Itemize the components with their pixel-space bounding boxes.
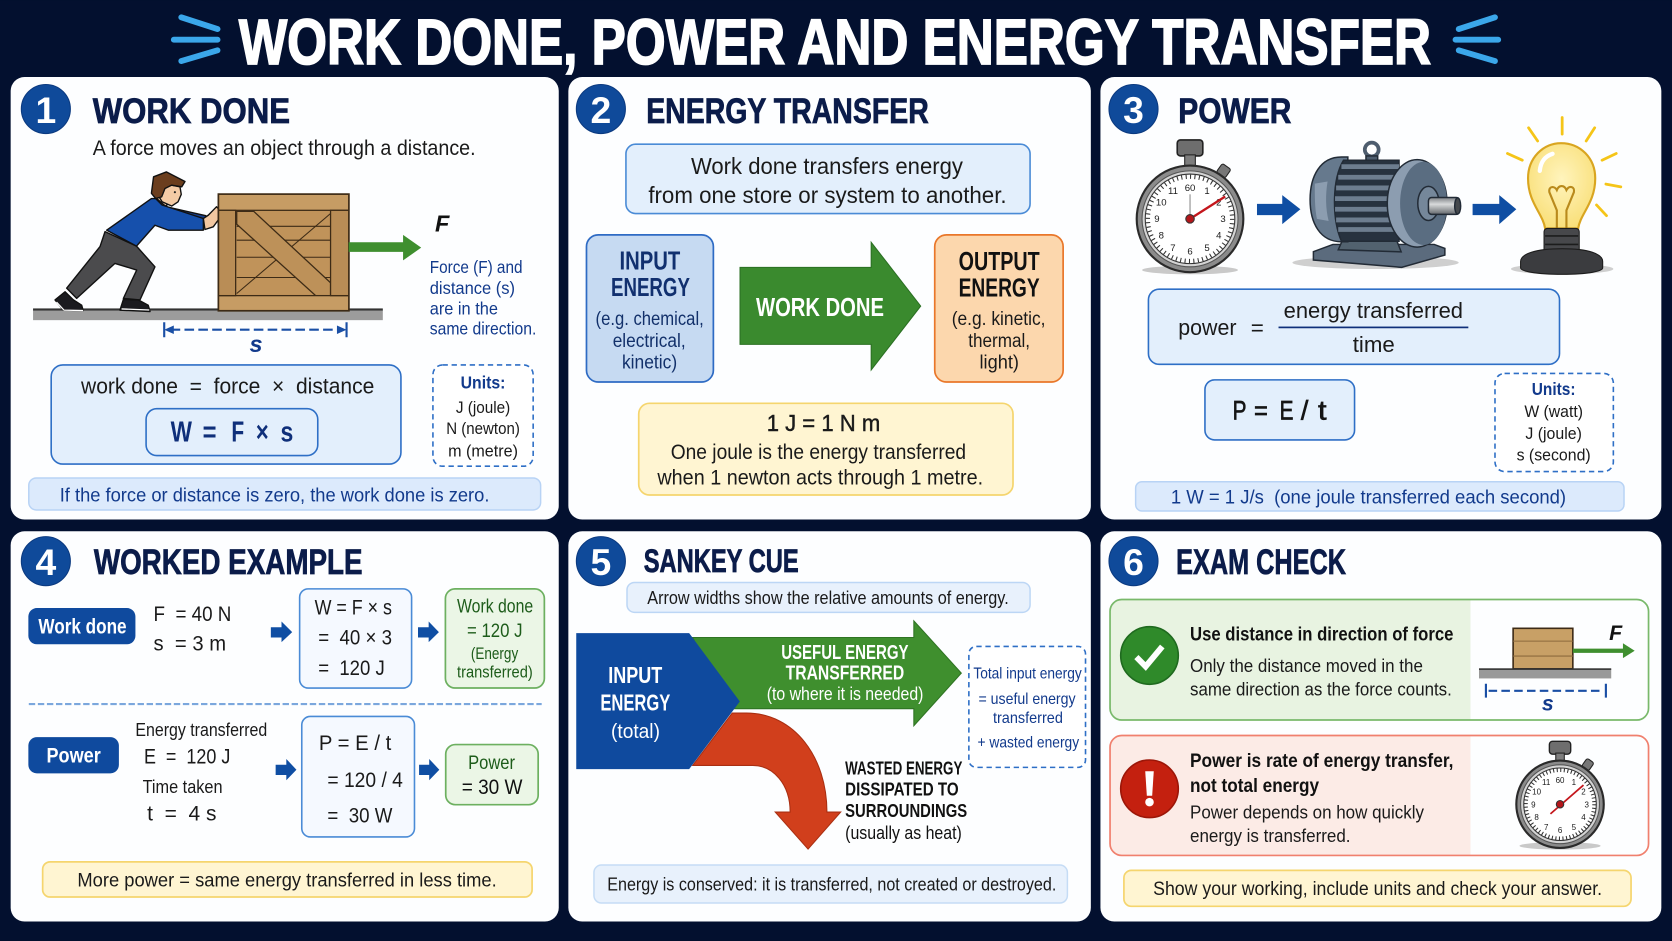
definition box: from one store or system to another. xyxy=(648,182,1007,208)
formula box: power: power xyxy=(1178,315,1237,340)
result: work done: transferred) xyxy=(457,662,533,681)
icon: tick xyxy=(1121,627,1178,684)
number badge 6 xyxy=(1109,537,1158,586)
direction note: same direction. xyxy=(430,319,536,339)
diagram: crate with force and distance: s xyxy=(1542,691,1554,715)
sankey caption: Arrow widths show the relative amounts of energy. xyxy=(647,587,1009,608)
arrow xyxy=(276,759,296,780)
output energy box: thermal, xyxy=(968,331,1030,352)
arrow: stopwatch to motor xyxy=(1257,195,1300,224)
definition box xyxy=(626,144,1030,214)
direction note: Force (F) and xyxy=(430,257,523,277)
input energy box: kinetic) xyxy=(622,353,677,374)
icon: stopwatch: 8 xyxy=(1159,231,1164,242)
card: distance check xyxy=(1110,600,1649,720)
input energy box: electrical, xyxy=(613,331,686,352)
icon: stopwatch small: 3 xyxy=(1584,800,1589,809)
input energy box xyxy=(586,235,713,382)
label: wasted energy: DISSIPATED TO xyxy=(845,780,959,800)
label: F: F xyxy=(435,211,450,237)
sankey arrow: useful energy: (to where it is needed) xyxy=(767,684,923,704)
card: power warning: Power depends on how quickly xyxy=(1190,803,1425,823)
sankey block: input energy: INPUT xyxy=(608,662,663,688)
sankey arrow: wasted energy xyxy=(693,713,841,849)
formula box: work done: work done = force × distance xyxy=(80,374,374,399)
diagram: crate with force and distance xyxy=(1479,621,1635,715)
icon: stopwatch small: 10 xyxy=(1532,788,1542,797)
joule definition box: One joule is the energy transferred xyxy=(671,440,966,464)
note: watt definition: 1 W = 1 J/s (one joule transferred each second) xyxy=(1171,487,1566,509)
units box xyxy=(433,365,533,466)
note: energy conserved: Energy is conserved: it is transferred, not created or destroyed. xyxy=(607,874,1056,895)
result: work done: Work done xyxy=(457,596,533,617)
joule definition box xyxy=(639,403,1013,495)
note: zero work xyxy=(29,478,541,510)
output energy box: (e.g. kinetic, xyxy=(952,309,1046,330)
number badge 5: 5 xyxy=(590,541,611,583)
arrow xyxy=(419,759,439,780)
pill: work done xyxy=(28,608,135,644)
distance marker s xyxy=(164,322,347,357)
formula: P = E / t: / xyxy=(1301,395,1309,425)
formula: P = E / t: = xyxy=(1254,395,1268,425)
icon: light bulb xyxy=(1507,118,1621,274)
number badge 3: 3 xyxy=(1123,89,1144,131)
result: work done: = 120 J xyxy=(467,621,523,642)
icon: stopwatch small: 7 xyxy=(1544,823,1549,832)
units box: Units: xyxy=(461,372,505,392)
givens: energy and time: Energy transferred xyxy=(135,720,267,740)
pill: work done: Work done xyxy=(38,615,127,639)
heading: energy transfer: ENERGY TRANSFER xyxy=(646,92,929,131)
icon: person pushing xyxy=(55,172,220,312)
arrow: work done xyxy=(740,242,921,370)
card: distance check: Only the distance moved in the xyxy=(1190,656,1423,676)
givens: force and distance xyxy=(154,602,231,656)
arrow: motor to bulb xyxy=(1473,195,1516,224)
pill: power xyxy=(28,737,119,773)
result: power xyxy=(446,745,538,805)
icon: stopwatch: 6 xyxy=(1187,247,1193,258)
formula: W = F x s: × xyxy=(256,417,269,449)
definition box: Work done transfers energy xyxy=(691,153,963,179)
note: more power xyxy=(43,862,532,897)
output energy box: ENERGY xyxy=(959,275,1040,303)
units box: W (watt) xyxy=(1524,402,1583,421)
sankey block: input energy: (total) xyxy=(611,721,660,743)
result: power: Power xyxy=(468,752,515,774)
icon: stopwatch small: 8 xyxy=(1534,813,1539,822)
icon: stopwatch xyxy=(1137,140,1243,274)
direction note xyxy=(430,257,536,339)
icon: stopwatch small: 1 xyxy=(1572,778,1577,787)
formula: P = E / t xyxy=(1205,380,1355,440)
note: more power: More power = same energy transferred in less time. xyxy=(77,870,497,891)
formula: W = F x s: F xyxy=(231,417,244,449)
icon: stopwatch small: 4 xyxy=(1581,813,1586,822)
calculation: work done: = 120 J xyxy=(318,656,385,680)
output energy box xyxy=(935,235,1063,382)
panel: sankey cue xyxy=(568,531,1091,922)
label: wasted energy: SURROUNDINGS xyxy=(845,801,967,821)
calculation: power: = 120 / 4 xyxy=(327,768,403,792)
card: power warning: energy is transferred. xyxy=(1190,826,1351,846)
formula box: work done xyxy=(51,365,401,464)
result: work done: (Energy xyxy=(471,644,519,663)
energy equation box xyxy=(969,646,1086,767)
icon: exclamation xyxy=(1121,760,1178,818)
heading: worked example: WORKED EXAMPLE xyxy=(94,543,363,582)
card: power warning: Power is rate of energy transfer, xyxy=(1190,750,1453,772)
panel: work done xyxy=(11,77,559,520)
input energy box: ENERGY xyxy=(611,274,690,302)
icon: stopwatch: 9 xyxy=(1154,214,1160,225)
joule definition box: when 1 newton acts through 1 metre. xyxy=(656,465,983,489)
icon: stopwatch small xyxy=(1516,741,1604,850)
label: wasted energy: WASTED ENERGY xyxy=(845,758,962,778)
sankey caption xyxy=(627,582,1030,612)
result: work done xyxy=(445,589,544,688)
formula: P = E / t: P xyxy=(1233,395,1247,425)
diagram: crate with force and distance: F xyxy=(1609,621,1623,645)
icon: stopwatch: 7 xyxy=(1170,243,1176,254)
givens: energy and time: t = 4 s xyxy=(147,801,216,825)
distance marker s: s xyxy=(250,331,263,357)
icon: wooden crate xyxy=(219,194,349,311)
givens: force and distance: F = 40 N xyxy=(154,602,231,626)
panel: power xyxy=(1100,77,1661,520)
number badge 2: 2 xyxy=(590,89,611,131)
formula: P = E / t: t xyxy=(1318,395,1327,425)
units box: J (joule) xyxy=(1525,424,1582,443)
sankey block: input energy: ENERGY xyxy=(600,689,671,715)
formula: P = E / t: E xyxy=(1280,395,1293,425)
subtitle: A force moves an object through a distance. xyxy=(93,136,476,160)
sankey arrow: useful energy: USEFUL ENERGY xyxy=(781,642,909,664)
givens: energy and time: E = 120 J xyxy=(144,745,230,769)
sankey arrow: useful energy xyxy=(693,621,961,726)
input energy box: INPUT xyxy=(620,247,681,275)
direction note: are in the xyxy=(430,298,498,318)
givens: force and distance: s = 3 m xyxy=(154,632,226,656)
formula: W = F x s xyxy=(146,409,318,456)
card: distance check: same direction as the force counts. xyxy=(1190,679,1452,699)
panel: worked example xyxy=(11,531,559,922)
result: power: = 30 W xyxy=(462,776,523,799)
formula: W = F x s: = xyxy=(203,417,216,449)
arrow xyxy=(418,621,439,642)
number badge 3 xyxy=(1109,84,1158,134)
panel: energy transfer xyxy=(568,77,1091,520)
arrow: force xyxy=(349,235,421,260)
icon: stopwatch small: 9 xyxy=(1531,800,1536,809)
units box: s (second) xyxy=(1517,445,1591,464)
calculation: work done: = 40 × 3 xyxy=(318,625,392,649)
card: power warning xyxy=(1110,735,1649,855)
icon: stopwatch: 60 xyxy=(1185,183,1195,194)
icon: stopwatch: 2 xyxy=(1216,198,1221,209)
note: watt definition xyxy=(1136,482,1624,511)
icon: stopwatch: 11 xyxy=(1168,186,1178,197)
note: show your working xyxy=(1124,870,1631,906)
formula: W = F x s: s xyxy=(280,417,293,449)
formula box: power: time xyxy=(1353,332,1395,357)
formula box: power xyxy=(1148,289,1560,364)
energy equation box: + wasted energy xyxy=(978,735,1079,752)
number badge 1: 1 xyxy=(35,89,56,131)
number badge 2 xyxy=(576,84,625,134)
icon: stopwatch: 4 xyxy=(1216,231,1222,242)
number badge 6: 6 xyxy=(1123,541,1144,583)
number badge 1 xyxy=(21,84,70,134)
icon: stopwatch: 10 xyxy=(1156,198,1167,209)
formula: W = F x s: W xyxy=(171,417,193,449)
card: power warning: not total energy xyxy=(1190,775,1319,797)
number badge 5 xyxy=(576,537,625,586)
energy equation box: Total input energy xyxy=(973,665,1082,682)
number badge 4 xyxy=(21,537,70,586)
output energy box: light) xyxy=(980,353,1019,374)
note: show your working: Show your working, include units and check your answer. xyxy=(1153,879,1602,900)
sankey block: input energy xyxy=(576,633,740,769)
calculation: power: = 30 W xyxy=(327,803,393,827)
formula box: power: = xyxy=(1251,315,1264,340)
card: distance check: Use distance in direction of force xyxy=(1190,625,1454,646)
icon: stopwatch small: 6 xyxy=(1558,826,1563,835)
ground xyxy=(33,308,383,320)
calculation: power: P = E / t xyxy=(319,731,391,755)
units box: J (joule) xyxy=(456,398,510,417)
note: energy conserved xyxy=(594,865,1067,903)
note: zero work: If the force or distance is zero, the work done is zero. xyxy=(60,485,489,506)
icon: stopwatch small: 60 xyxy=(1556,776,1565,785)
panel: exam check xyxy=(1100,531,1661,922)
output energy box: OUTPUT xyxy=(959,248,1040,276)
givens: energy and time xyxy=(135,720,267,825)
units box: Units: xyxy=(1532,379,1575,399)
icon: electric motor xyxy=(1292,143,1461,269)
icon: stopwatch: 1 xyxy=(1204,186,1210,197)
sankey arrow: useful energy: TRANSFERRED xyxy=(786,663,904,685)
energy equation box: = useful energy xyxy=(978,691,1076,708)
icon: stopwatch: 3 xyxy=(1220,214,1226,225)
pill: power: Power xyxy=(46,744,101,768)
calculation: work done xyxy=(300,589,412,688)
joule definition box: 1 J = 1 N m xyxy=(767,410,880,436)
icon: stopwatch small: 11 xyxy=(1542,778,1551,787)
label: wasted energy xyxy=(845,758,967,843)
units box xyxy=(1495,373,1613,472)
heading: sankey cue: SANKEY CUE xyxy=(644,543,799,579)
icon: stopwatch: 5 xyxy=(1204,243,1210,254)
heading: exam check: EXAM CHECK xyxy=(1176,543,1346,582)
number badge 4: 4 xyxy=(35,541,56,583)
units box: N (newton) xyxy=(446,419,520,438)
arrow: work done: WORK DONE xyxy=(756,294,884,322)
input energy box: (e.g. chemical, xyxy=(596,309,704,330)
icon: stopwatch small: 5 xyxy=(1572,823,1577,832)
arrow xyxy=(271,621,292,642)
heading: power: POWER xyxy=(1178,92,1291,131)
calculation: power xyxy=(302,716,414,837)
energy equation box: transferred xyxy=(993,710,1063,727)
formula box: power: energy transferred xyxy=(1284,298,1463,323)
icon: stopwatch small: 2 xyxy=(1581,788,1586,797)
calculation: work done: W = F × s xyxy=(315,595,392,619)
givens: energy and time: Time taken xyxy=(143,777,223,797)
label: wasted energy: (usually as heat) xyxy=(845,823,962,843)
heading: work done: WORK DONE xyxy=(93,92,290,131)
units box: m (metre) xyxy=(448,442,518,461)
direction note: distance (s) xyxy=(430,278,515,298)
